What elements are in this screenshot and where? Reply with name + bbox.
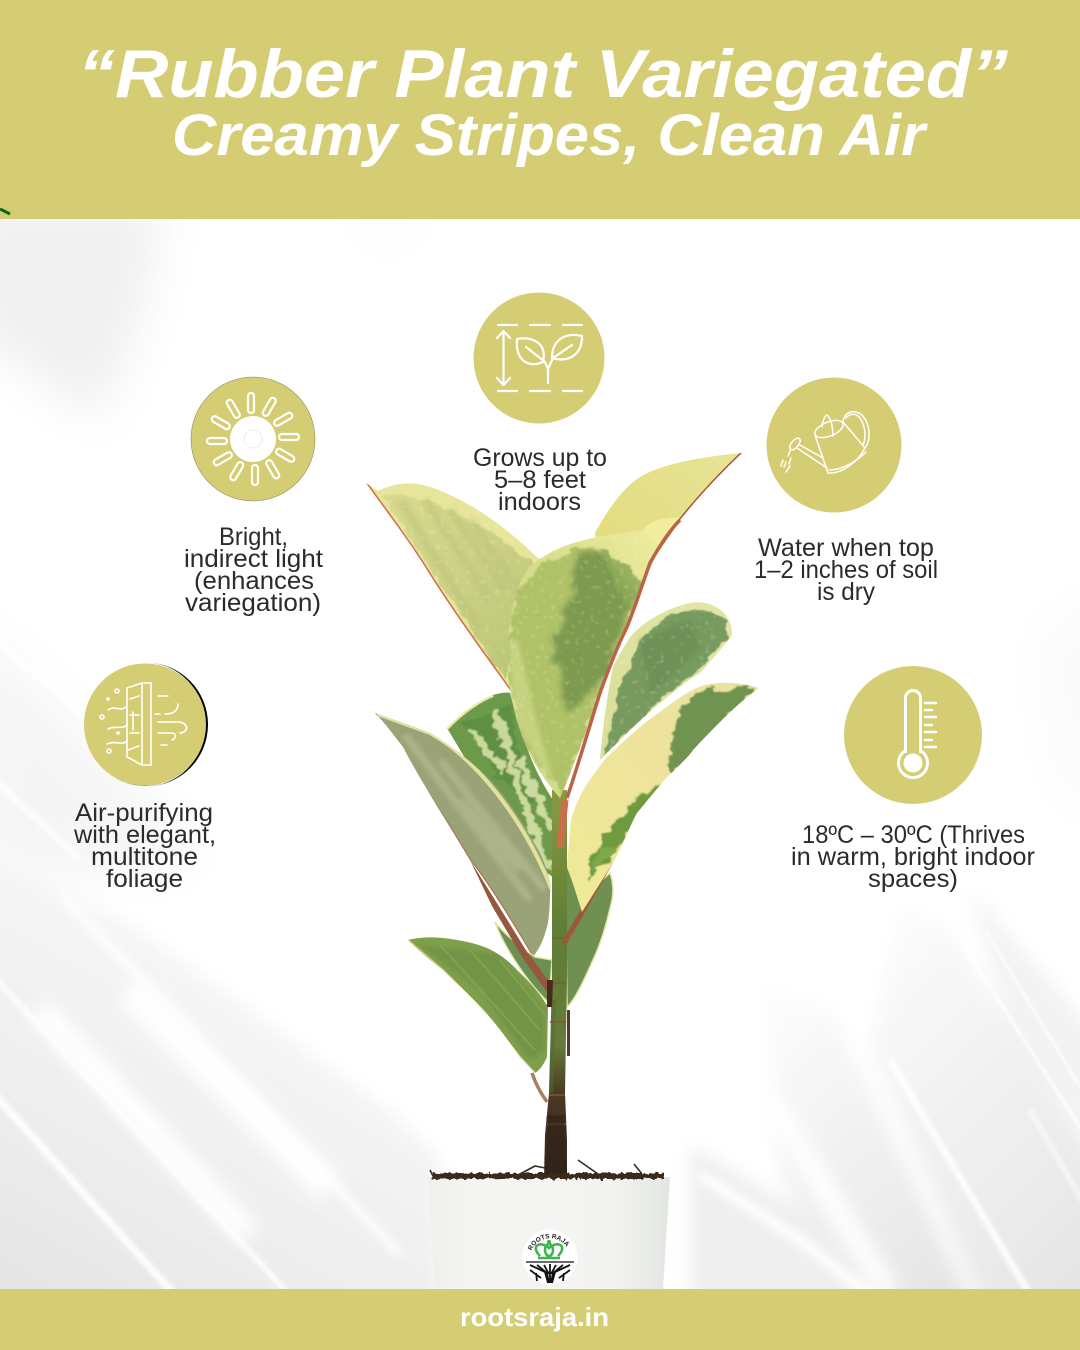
feature: temperature (791, 666, 1035, 893)
icon: thermometer (844, 666, 982, 804)
center leaf notch highlight (643, 517, 680, 548)
text: watering: Water when top (758, 534, 934, 562)
footer band (0, 1289, 1080, 1350)
title (78, 36, 1008, 168)
leaf shoot stub (532, 1073, 547, 1102)
text: temperature: spaces) (868, 865, 958, 893)
text: light: variegation) (185, 589, 321, 617)
leaf: center big (508, 518, 680, 798)
text: light: indirect light (184, 545, 323, 573)
text: growth: 5–8 feet (494, 466, 586, 494)
text: temperature: 18ºC – 30ºC (Thrives (802, 821, 1025, 849)
text: temperature: in warm, bright indoor (791, 843, 1035, 871)
text: growth (473, 444, 607, 516)
text: temperature (791, 821, 1035, 893)
icon: plant height (474, 292, 604, 424)
leaf: lower right cream (567, 682, 759, 912)
header band (0, 0, 1080, 219)
leaf: upper left (366, 483, 539, 691)
text: air purifying: foliage (106, 865, 183, 893)
icon: sun (191, 377, 315, 501)
text: growth: Grows up to (473, 444, 607, 472)
leaf: lower right behind (565, 860, 613, 1007)
title: “Rubber Plant Variegated” (78, 36, 1008, 112)
plant photo illustration (360, 450, 765, 1178)
feature: air purifying (73, 662, 216, 893)
leaf: behind left variegated green (447, 692, 552, 877)
stem back strip (567, 1010, 570, 1056)
red petiole left (470, 860, 549, 995)
text: air purifying: Air-purifying (75, 799, 213, 827)
text: air purifying (73, 799, 216, 893)
text: watering: 1–2 inches of soil (754, 556, 938, 584)
feature: watering (754, 378, 938, 606)
text: growth: indoors (498, 488, 581, 516)
feature: growth height (473, 292, 607, 516)
leaf: top right yellow (595, 453, 742, 552)
logo sticker (522, 1230, 578, 1284)
text: air purifying: multitone (91, 843, 198, 871)
leaf: lower left grey green (375, 713, 550, 956)
feature: light (184, 377, 323, 617)
leaf: lowest green (405, 935, 553, 1077)
node (547, 980, 553, 1007)
footer url: rootsraja.in (460, 1302, 609, 1332)
icon: air filter (84, 662, 208, 786)
center midrib (567, 520, 680, 798)
text: air purifying: with elegant, (73, 821, 216, 849)
leaf: right dark green (600, 602, 732, 760)
red petiole right (563, 863, 613, 947)
text: light (184, 523, 323, 617)
stem (544, 790, 567, 1178)
icon: watering can (766, 378, 902, 512)
title: Creamy Stripes, Clean Air (172, 103, 929, 168)
logo sticker: ROOTS RAJA (528, 1234, 569, 1250)
text: light: (enhances (194, 567, 314, 595)
leaf: lower left behind (495, 922, 552, 1003)
text: light: Bright, (219, 523, 288, 551)
soil (430, 1160, 664, 1179)
text: watering (754, 534, 938, 606)
text: watering: is dry (817, 578, 875, 606)
pot (429, 1159, 670, 1289)
